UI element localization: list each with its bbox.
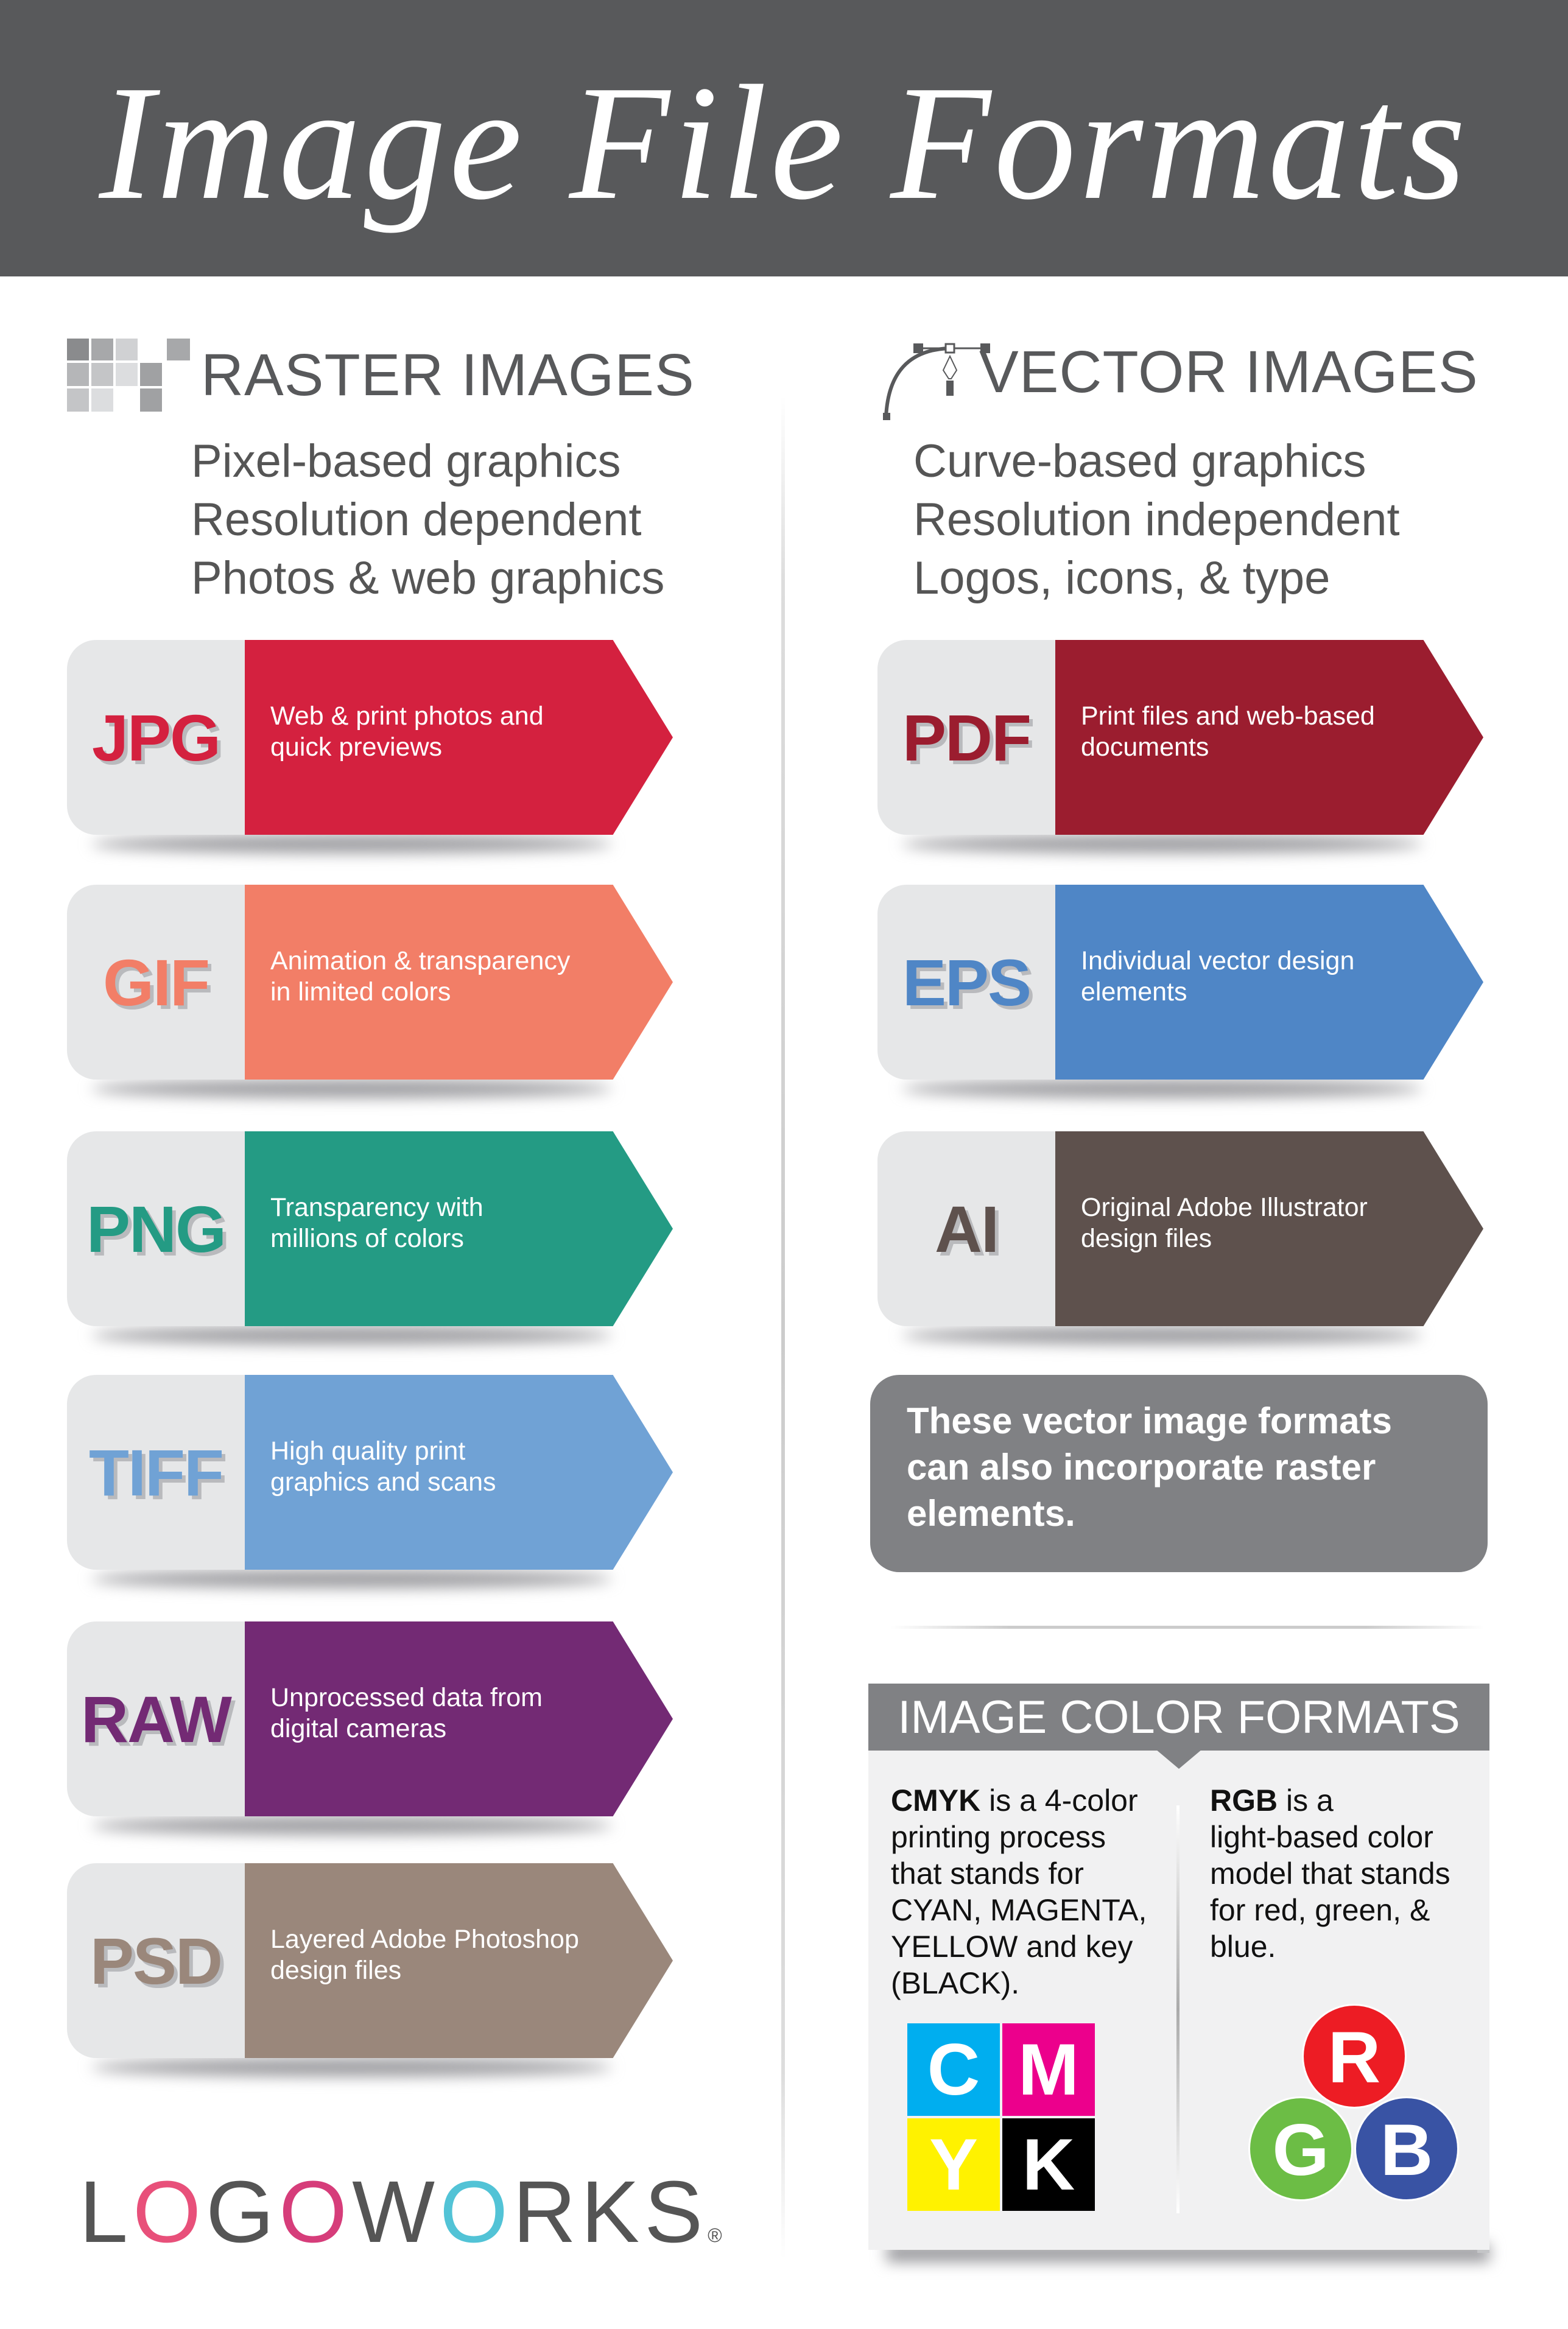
icon: vector pen [883, 343, 990, 420]
text: RGB: RGB is a [1210, 1783, 1334, 1818]
callout: vector note: These vector image formats [907, 1400, 1392, 1441]
header banner [0, 0, 1568, 276]
card: RAW: RAW [81, 1682, 231, 1756]
card: EPS: EPS [902, 945, 1030, 1019]
callout: vector note: elements. [907, 1493, 1075, 1534]
text: CMYK: (BLACK). [891, 1966, 1019, 2000]
vector subtitles: Logos, icons, & type [913, 552, 1330, 604]
text: CMYK: YELLOW and key [891, 1930, 1133, 1964]
icon: RGB circles: G [1272, 2109, 1329, 2191]
card: RAW [67, 1621, 673, 1844]
vector subtitles [913, 435, 1400, 604]
text: RGB: for red, green, & [1210, 1893, 1430, 1927]
icon: CMYK squares: M [1018, 2029, 1079, 2110]
text: CMYK: CMYK is a 4-color [891, 1783, 1138, 1818]
icon: raster pixels [67, 339, 190, 412]
text: CMYK: printing process [891, 1820, 1106, 1854]
heading: raster images: RASTER IMAGES [201, 342, 695, 408]
icon: RGB circles: R [1328, 2017, 1380, 2098]
text: CMYK: that stands for [891, 1857, 1084, 1891]
raster subtitles: Pixel-based graphics [191, 435, 621, 487]
card: AI: Original Adobe Illustrator [1081, 1193, 1368, 1222]
card: PSD: PSD [90, 1924, 222, 1997]
title: Image File Formats [99, 52, 1469, 234]
card: JPG: quick previews [270, 732, 442, 762]
card: AI: AI [935, 1192, 998, 1265]
card: GIF: Animation & transparency [270, 946, 570, 975]
icon: CMYK squares: Y [929, 2124, 978, 2205]
card: TIFF: TIFF [89, 1436, 223, 1509]
card: JPG [67, 640, 673, 863]
card: PSD [67, 1863, 673, 2086]
card: TIFF [67, 1375, 673, 1598]
text: RGB [1210, 1783, 1450, 1964]
icon: RGB circles: B [1380, 2109, 1433, 2191]
text: CMYK [891, 1783, 1147, 2000]
card: PSD: Layered Adobe Photoshop [270, 1925, 579, 1954]
text: CMYK: CYAN, MAGENTA, [891, 1893, 1147, 1927]
icon: CMYK squares [907, 2023, 1095, 2211]
logo: logoworks: LOGOWORKS® [79, 2163, 722, 2261]
raster subtitles: Resolution dependent [191, 494, 641, 546]
card: AI: design files [1081, 1224, 1212, 1253]
card: PDF [877, 640, 1483, 863]
card: AI [877, 1131, 1483, 1354]
card: PDF: Print files and web-based [1081, 701, 1375, 731]
card: JPG: Web & print photos and [270, 701, 544, 731]
card: PNG: millions of colors [270, 1224, 464, 1253]
card: GIF: GIF [103, 945, 209, 1019]
vector subtitles: Curve-based graphics [913, 435, 1366, 487]
vector subtitles: Resolution independent [913, 494, 1400, 546]
divider horizontal [891, 1626, 1485, 1629]
card: PDF: documents [1081, 732, 1209, 762]
text: RGB: model that stands [1210, 1857, 1450, 1891]
card: EPS: Individual vector design [1081, 946, 1354, 975]
card: GIF [67, 885, 673, 1108]
card: TIFF: High quality print [270, 1436, 465, 1466]
card: TIFF: graphics and scans [270, 1467, 496, 1497]
card: EPS [877, 885, 1483, 1108]
card: JPG: JPG [92, 700, 220, 775]
text: RGB: blue. [1210, 1930, 1276, 1964]
color formats header [868, 1684, 1489, 1751]
color formats header: IMAGE COLOR FORMATS [898, 1691, 1460, 1743]
callout: vector note [870, 1375, 1488, 1572]
icon: RGB circles [1248, 2004, 1459, 2201]
card: PNG: PNG [86, 1192, 225, 1265]
card: PDF: PDF [902, 700, 1030, 775]
heading: vector images: VECTOR IMAGES [979, 339, 1478, 405]
divider vertical [781, 396, 785, 2259]
icon: CMYK squares: K [1022, 2124, 1075, 2205]
panel: image color formats [868, 1684, 1499, 2272]
raster subtitles [191, 435, 664, 604]
card: EPS: elements [1081, 977, 1187, 1006]
icon: CMYK squares: C [927, 2029, 980, 2110]
raster subtitles: Photos & web graphics [191, 552, 664, 604]
card: RAW: digital cameras [270, 1714, 446, 1743]
card: GIF: in limited colors [270, 977, 451, 1006]
card: PNG: Transparency with [270, 1193, 483, 1222]
callout: vector note: can also incorporate raster [907, 1447, 1376, 1488]
card: PNG [67, 1131, 673, 1354]
card: PSD: design files [270, 1956, 401, 1985]
text: RGB: light-based color [1210, 1820, 1433, 1854]
card: RAW: Unprocessed data from [270, 1683, 543, 1712]
